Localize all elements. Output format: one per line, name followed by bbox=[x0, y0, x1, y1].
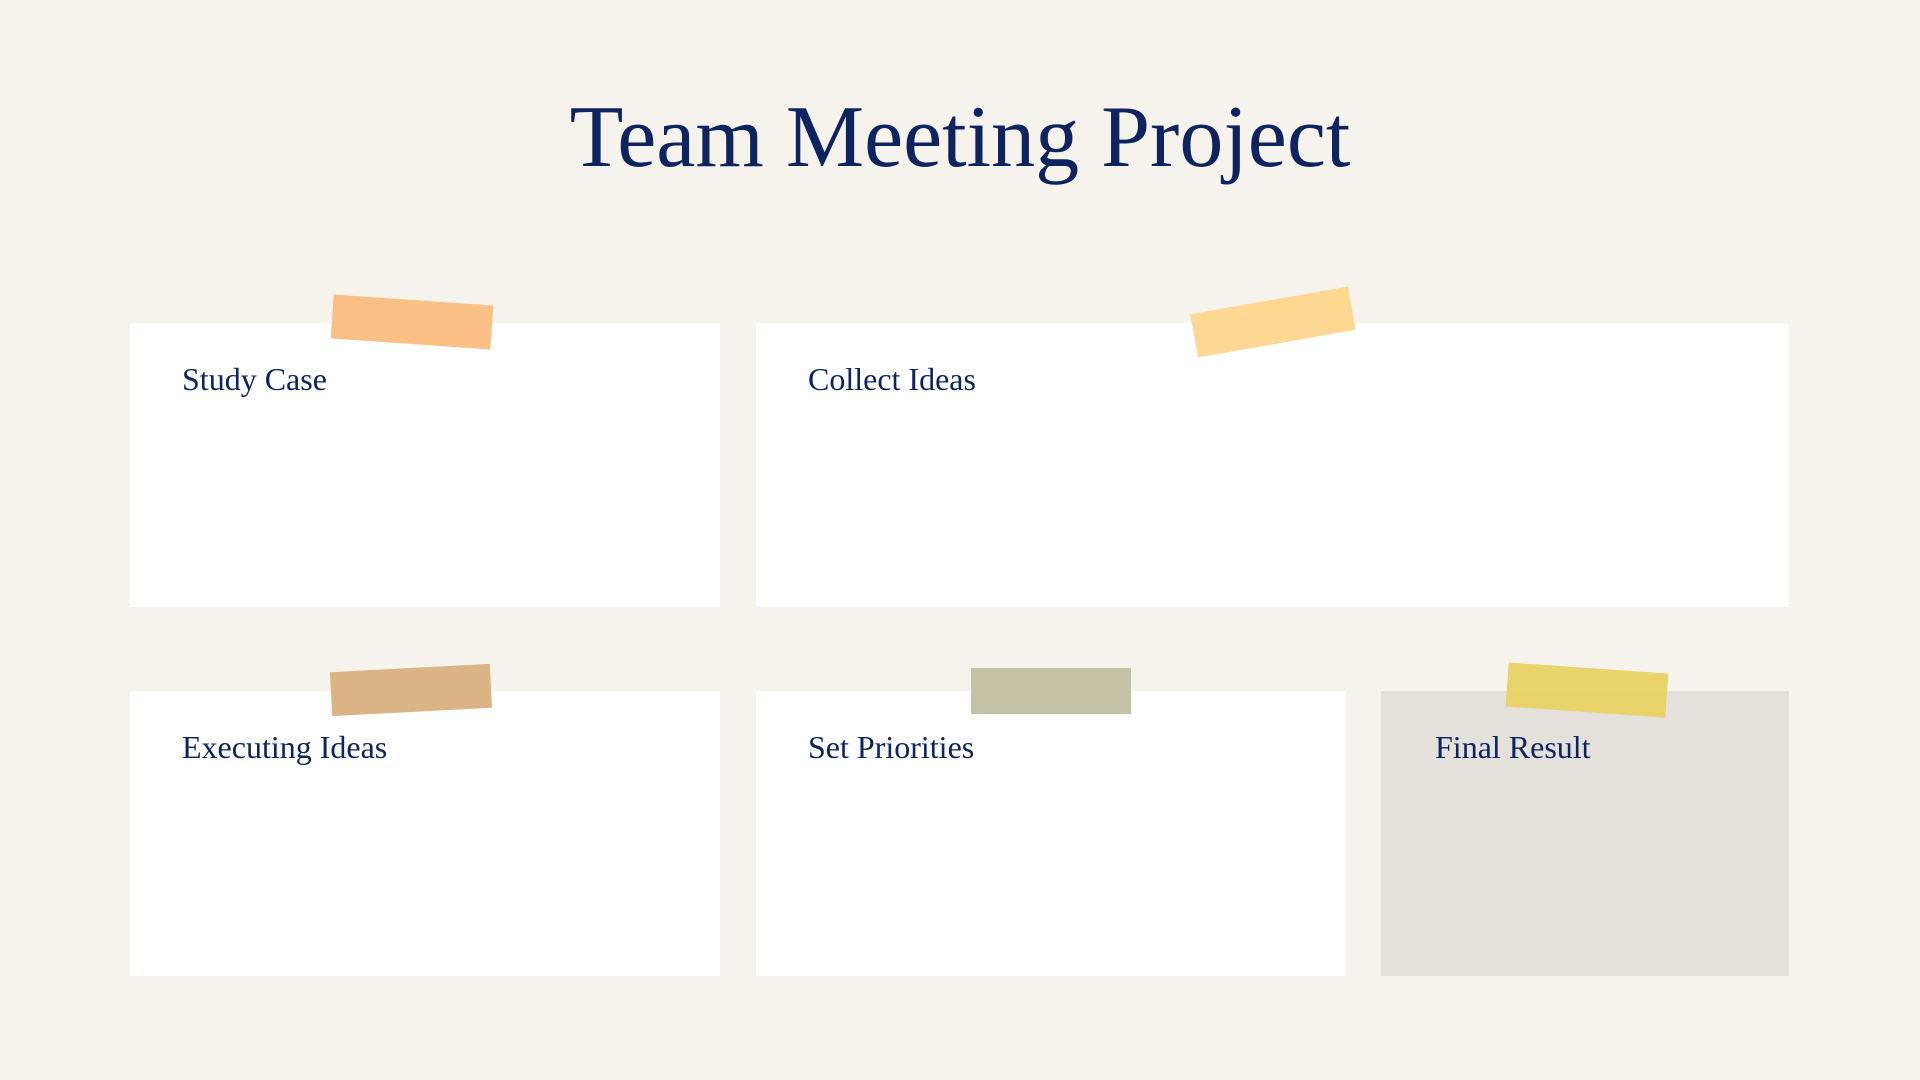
heading: study case: Study Case bbox=[182, 361, 327, 397]
panel: final result bbox=[1381, 691, 1789, 976]
tape: yellow bbox=[1506, 662, 1668, 718]
panel: executing ideas bbox=[130, 691, 720, 976]
heading: final result: Final Result bbox=[1435, 729, 1591, 765]
title: Team Meeting Project bbox=[570, 89, 1350, 186]
heading: executing ideas: Executing Ideas bbox=[182, 729, 387, 765]
panel: study case bbox=[130, 323, 720, 607]
panel: set priorities bbox=[756, 691, 1346, 976]
tape: tan bbox=[330, 664, 492, 716]
tape: light yellow bbox=[1190, 286, 1356, 358]
tape: olive grey bbox=[971, 668, 1131, 714]
panel: collect ideas bbox=[756, 323, 1789, 607]
heading: collect ideas: Collect Ideas bbox=[808, 361, 976, 397]
tape: orange bbox=[331, 294, 493, 350]
heading: set priorities: Set Priorities bbox=[808, 729, 974, 765]
